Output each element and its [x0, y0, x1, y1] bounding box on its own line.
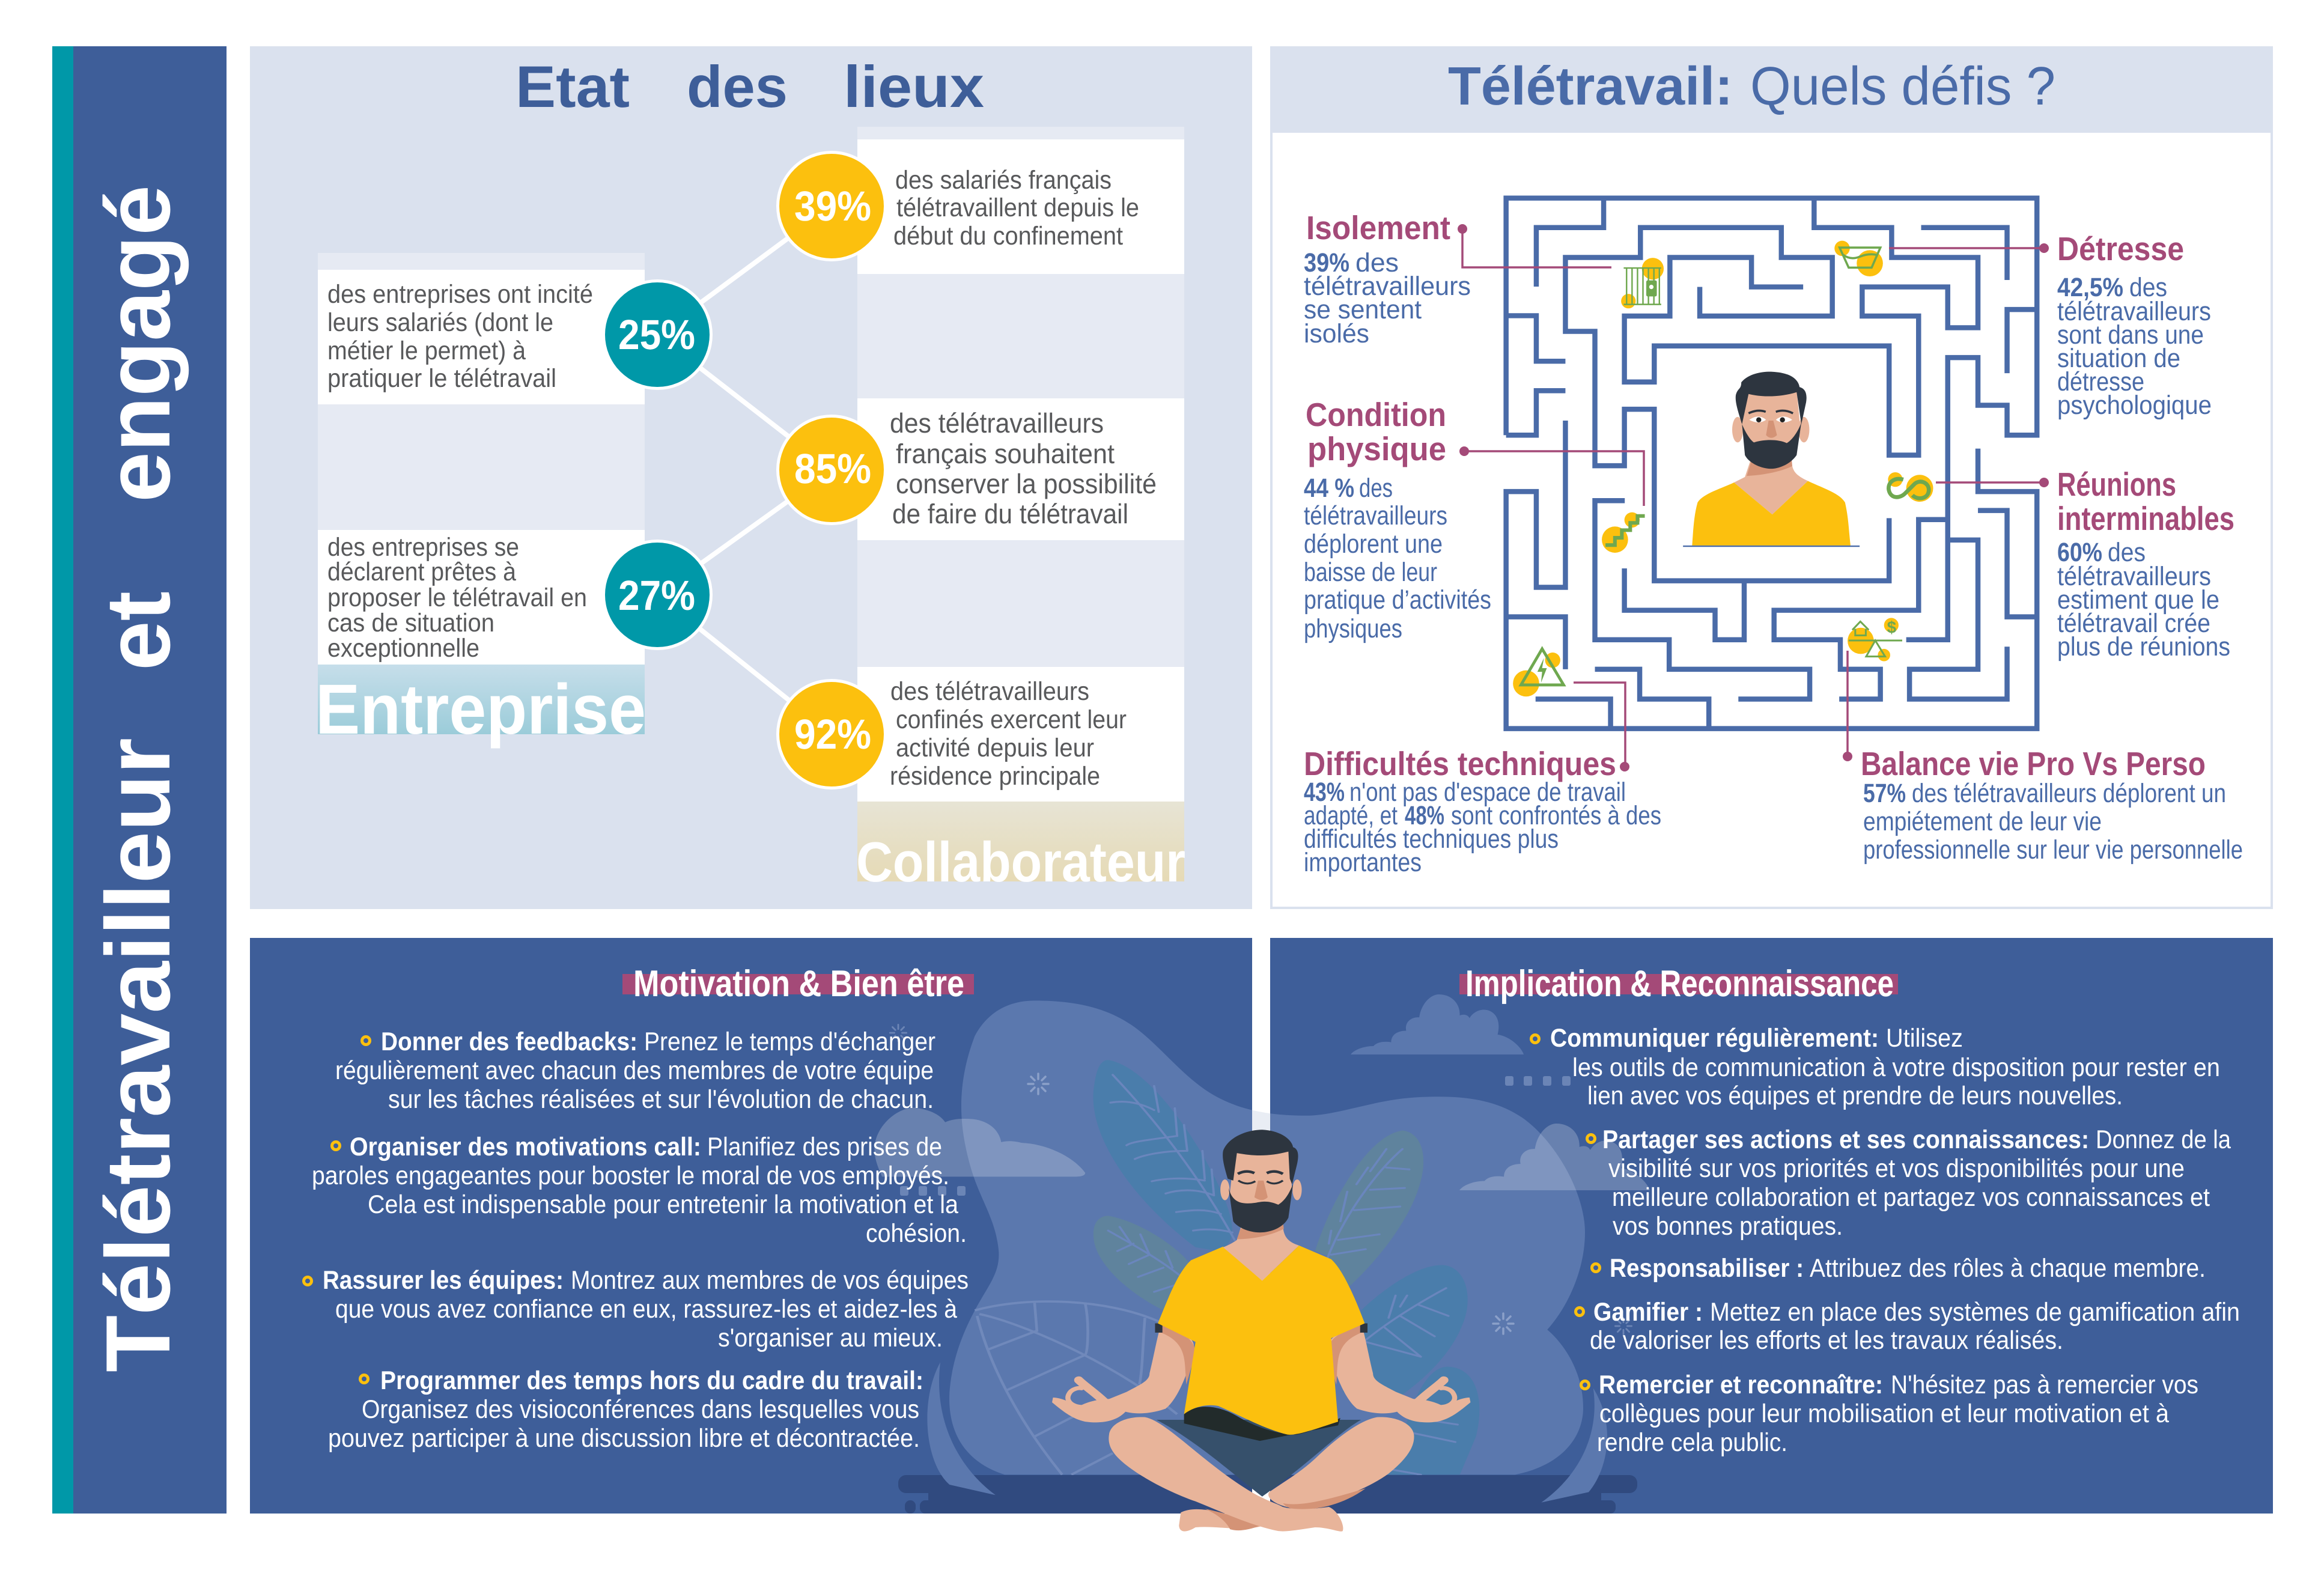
- item: communiquer: lien avec vos équipes et prendre de leurs nouvelles.: [1587, 1082, 2123, 1110]
- leaf: blue upper left: [1093, 1060, 1235, 1251]
- callout: Détresse: télétravailleurs: [2057, 297, 2211, 326]
- waist shadow: [1184, 1407, 1340, 1441]
- item: rassurer: Montrez aux membres de vos équipes: [571, 1266, 969, 1295]
- text: 85% télétravailleurs: français souhaitent: [896, 438, 1115, 469]
- callout: Condition physique: déplorent une: [1304, 529, 1443, 559]
- callout: Réunions interminables: 60%: [2057, 538, 2102, 567]
- stat: 25%: [602, 279, 713, 390]
- sidebar title: Télétravailleur: [87, 738, 189, 1372]
- text: 39% salariés: télétravaillent depuis le: [896, 193, 1139, 222]
- callout: Difficultés techniques: sont confrontés à des: [1451, 801, 1661, 830]
- item: partager: visibilité sur vos priorités et vos disponibilités pour une: [1608, 1154, 2185, 1183]
- heading: Télétravail quels défis: [1448, 56, 2055, 117]
- text: 85% télétravailleurs: conserver la possibilité: [896, 468, 1157, 499]
- text: 25% entreprises: des entreprises ont incité: [327, 280, 593, 309]
- callout: Réunions interminables: des: [2108, 538, 2146, 567]
- leg right shadow: [1283, 1488, 1366, 1510]
- callout: Isolement: [1304, 209, 1471, 348]
- blob: [949, 1000, 1585, 1474]
- item: rassurer: s'organiser au mieux.: [718, 1324, 943, 1352]
- text: 92% télétravailleurs: résidence principale: [890, 762, 1100, 791]
- callout: Condition physique: physique: [1307, 430, 1446, 467]
- callout: Détresse: sont dans une: [2057, 320, 2204, 350]
- icon: jail: [1621, 258, 1664, 308]
- panel: implication text: [1459, 963, 2240, 1457]
- icon: wash tub: [1834, 241, 1883, 276]
- item: feedbacks: Prenez le temps d'échanger: [644, 1027, 935, 1056]
- icon: stairs: [1602, 513, 1645, 553]
- item: motivations call: Planifiez des prises de: [707, 1133, 942, 1161]
- callout: Détresse: psychologique: [2057, 391, 2212, 420]
- leaf: large outline: [975, 1301, 1177, 1474]
- item: feedbacks: régulièrement avec chacun des membres de votre équipe: [335, 1056, 934, 1085]
- callout: Balance vie Pro Vs Perso: Balance vie Pro Vs Perso: [1861, 745, 2206, 782]
- callout: Détresse: des: [2129, 273, 2167, 302]
- cloud right: [1459, 1124, 1650, 1190]
- callout: Balance vie Pro Vs Perso: empiétement de leur vie: [1863, 807, 2102, 836]
- floor band: [898, 1475, 1637, 1514]
- item: gamifier: [1575, 1298, 2240, 1355]
- icon: balance: $: [1887, 618, 1896, 636]
- item: gamifier: Gamifier :: [1593, 1298, 1703, 1327]
- callout: Difficultés techniques: 48%: [1405, 801, 1444, 830]
- connector lines: [657, 206, 832, 734]
- item: temps hors cadre: pouvez participer à une discussion libre et décontractée.: [328, 1424, 920, 1453]
- item: remercier: N'hésitez pas à remercier vos: [1891, 1371, 2198, 1399]
- heading: Etat des lieux: [516, 53, 984, 120]
- label: Entreprise: Entreprise: [315, 670, 646, 749]
- item: responsabiliser: Attribuez des rôles à chaque membre.: [1810, 1254, 2206, 1283]
- stat: 92%: 92%: [794, 711, 871, 758]
- callout: Isolement: télétravailleurs: [1304, 272, 1471, 301]
- center figure: man bust: [1683, 372, 1860, 546]
- text: 27% entreprises: déclarent prêtes à: [327, 558, 516, 586]
- leg right: [1268, 1417, 1414, 1509]
- callout: Condition physique: physiques: [1304, 614, 1402, 644]
- callout: Isolement: Isolement: [1306, 209, 1450, 246]
- text: 39% salariés: [893, 166, 1139, 251]
- text: 27% entreprises: exceptionnelle: [327, 634, 479, 663]
- item: partager: meilleure collaboration et partagez vos connaissances et: [1612, 1183, 2210, 1212]
- callout: Réunions interminables: [2057, 466, 2234, 662]
- text: 92% télétravailleurs: confinés exercent leur: [896, 705, 1127, 734]
- beard: [1229, 1184, 1293, 1232]
- stat: 27%: 27%: [618, 572, 695, 619]
- item: gamifier: Mettez en place des systèmes de gamification afin: [1710, 1298, 2240, 1327]
- item: responsabiliser: Responsabiliser :: [1610, 1254, 1804, 1283]
- callout: Difficultés techniques: n'ont pas d'espace de travail: [1349, 777, 1626, 807]
- sidebar: [52, 46, 227, 1514]
- background illustration: [874, 994, 1650, 1514]
- face: [1230, 1151, 1292, 1231]
- text: 25% entreprises: leurs salariés (dont le: [327, 308, 553, 337]
- callout: Détresse: détresse: [2057, 367, 2144, 397]
- foot left shadow: [1205, 1509, 1261, 1530]
- item: remercier: [1581, 1371, 2198, 1457]
- item: motivations call: cohésion.: [866, 1219, 967, 1248]
- item: remercier: Remercier et reconnaître:: [1599, 1371, 1883, 1399]
- text: 85% télétravailleurs: de faire du télétravail: [892, 498, 1128, 529]
- callout: Détresse: situation de: [2057, 344, 2180, 373]
- callout: Condition physique: Condition: [1306, 396, 1446, 433]
- arms and hands: [1052, 1323, 1470, 1422]
- callout: Balance vie Pro Vs Perso: professionnelle sur leur vie personnelle: [1863, 835, 2243, 865]
- stat: 39%: 39%: [794, 183, 871, 230]
- stat: 92%: [776, 679, 887, 790]
- maze: [1506, 198, 2037, 729]
- callout: Réunions interminables: estiment que le: [2057, 585, 2219, 615]
- hand left: [1052, 1380, 1127, 1422]
- sidebar title: [87, 185, 189, 1372]
- stat: 25%: 25%: [618, 311, 695, 358]
- callout: Réunions interminables: télétravail crée: [2057, 609, 2210, 638]
- icon: warning: [1513, 649, 1563, 696]
- neck shadow: [1237, 1222, 1284, 1239]
- icon: infinity: [1888, 472, 1933, 502]
- callout: Difficultés techniques: adapté, et: [1304, 801, 1398, 830]
- item: responsabiliser: [1592, 1254, 2206, 1283]
- faint blob across gap: [949, 1000, 1585, 1474]
- label: Collaborateur: Collaborateur: [856, 830, 1185, 893]
- leg left: [1109, 1417, 1343, 1532]
- shorts: [1157, 1420, 1361, 1497]
- text: 27% entreprises: proposer le télétravail en: [327, 583, 587, 612]
- item: temps hors cadre: Programmer des temps hors du cadre du travail:: [380, 1366, 923, 1395]
- callout: Difficultés techniques: 43%: [1304, 777, 1345, 807]
- item: remercier: rendre cela public.: [1597, 1428, 1787, 1457]
- callout: Détresse: Détresse: [2057, 230, 2184, 267]
- leaf: blue right: [1343, 1265, 1468, 1407]
- cloud top right: [1351, 994, 1524, 1054]
- callout: Détresse: 42,5%: [2057, 273, 2123, 302]
- text: 25% entreprises: [327, 280, 593, 393]
- sidebar title: engagé: [87, 185, 189, 502]
- dots left: [900, 1186, 966, 1196]
- callout: Difficultés techniques: importantes: [1304, 848, 1422, 877]
- heading: Motivation et bien être: Motivation & Bien être: [633, 963, 964, 1005]
- hair: [1223, 1130, 1298, 1184]
- heading: Télétravail quels défis: Quels défis ?: [1750, 56, 2055, 117]
- nose: [1255, 1181, 1268, 1200]
- item: gamifier: de valoriser les efforts et les travaux réalisés.: [1590, 1326, 2063, 1355]
- text: 25% entreprises: pratiquer le télétravail: [327, 364, 556, 393]
- cloud left: [874, 1107, 1085, 1176]
- callout: Réunions interminables: télétravailleurs: [2057, 562, 2211, 591]
- item: temps hors cadre: [328, 1366, 923, 1453]
- callout: Difficultés techniques: Difficultés techniques: [1304, 745, 1616, 782]
- leaf: green left: [1094, 1216, 1188, 1310]
- sidebar title: et: [87, 591, 189, 671]
- item: remercier: collègues pour leur mobilisation et leur motivation et à: [1599, 1399, 2169, 1428]
- callout: Condition physique: télétravailleurs: [1304, 501, 1447, 531]
- callout: Condition physique: des: [1359, 473, 1393, 503]
- stat: 27%: [602, 540, 713, 650]
- callout: Condition physique: [1304, 396, 1491, 644]
- callout: Réunions interminables: Réunions: [2057, 466, 2176, 503]
- heading: Etat des lieux: Etat: [516, 53, 630, 120]
- callout: Condition physique: pratique d’activités: [1304, 585, 1491, 615]
- callout: Difficultés techniques: [1304, 745, 1661, 877]
- callout: Réunions interminables: interminables: [2057, 500, 2234, 537]
- item: temps hors cadre: Organisez des visioconférences dans lesquelles vous: [362, 1395, 919, 1424]
- item: rassurer: [304, 1266, 969, 1352]
- leaf: green right: [1315, 1130, 1423, 1286]
- crescents: [927, 1362, 1607, 1503]
- panel: motivation background: [250, 938, 1252, 1514]
- callout: Isolement: isolés: [1304, 319, 1369, 348]
- callout: Difficultés techniques: difficultés techniques plus: [1304, 824, 1559, 854]
- item: motivations call: [312, 1133, 967, 1248]
- text: 85% télétravailleurs: des télétravailleurs: [890, 407, 1104, 439]
- dots right: [1505, 1076, 1571, 1086]
- neck: [1223, 1223, 1299, 1280]
- text: 27% entreprises: des entreprises se: [327, 533, 519, 562]
- callout: Isolement: des: [1355, 248, 1399, 278]
- meditating man: [1052, 1130, 1470, 1532]
- stat: 85%: 85%: [794, 445, 871, 492]
- stat: 85%: [776, 415, 887, 525]
- item: rassurer: que vous avez confiance en eux, rassurez-les et aidez-les à: [335, 1295, 957, 1324]
- item: rassurer: Rassurer les équipes:: [323, 1266, 564, 1295]
- callout: Balance vie Pro Vs Perso: des télétravailleurs déplorent un: [1912, 779, 2226, 808]
- callout lines and dots: [1458, 224, 2049, 771]
- ears: [1220, 1179, 1302, 1200]
- panel: motivation text: [304, 963, 974, 1453]
- callout: Isolement: se sentent: [1304, 295, 1422, 324]
- icon: balance: [1848, 618, 1902, 662]
- text: 39% salariés: début du confinement: [893, 222, 1123, 251]
- column: collaborateur: [856, 127, 1185, 893]
- item: communiquer: Utilisez: [1886, 1024, 1963, 1053]
- heading: Etat des lieux: des: [687, 53, 788, 120]
- text: 25% entreprises: métier le permet) à: [327, 336, 526, 365]
- item: motivations call: Organiser des motivations call:: [350, 1133, 701, 1161]
- text: 92% télétravailleurs: des télétravailleurs: [890, 677, 1089, 706]
- item: partager: [1587, 1125, 2231, 1241]
- panel: télétravail quels défis: [1270, 46, 2273, 908]
- callout: Condition physique: baisse de leur: [1304, 558, 1437, 587]
- text: 92% télétravailleurs: activité depuis leur: [896, 734, 1094, 762]
- item: partager: Partager ses actions et ses connaissances:: [1602, 1125, 2089, 1154]
- item: motivations call: paroles engageantes pour booster le moral de vos employés.: [312, 1161, 949, 1190]
- item: partager: vos bonnes pratiques.: [1613, 1212, 1843, 1241]
- closed eyes and brows: [1238, 1172, 1283, 1184]
- item: communiquer: les outils de communication à votre disposition pour rester en: [1572, 1053, 2220, 1082]
- text: 27% entreprises: [327, 533, 587, 663]
- hand right: [1396, 1380, 1470, 1422]
- text: 39% salariés: des salariés français: [895, 166, 1112, 195]
- item: feedbacks: [335, 1027, 935, 1114]
- callout: Isolement: 39%: [1304, 248, 1349, 278]
- callout: Balance vie Pro Vs Perso: 57%: [1863, 779, 1906, 808]
- sparkles: [890, 1024, 1632, 1334]
- item: motivations call: Cela est indispensable pour entretenir la motivation et la: [368, 1190, 958, 1219]
- item: feedbacks: Donner des feedbacks:: [381, 1027, 637, 1056]
- text: 85% télétravailleurs: [890, 407, 1157, 529]
- heading: Télétravail quels défis: Télétravail:: [1448, 56, 1733, 117]
- t-shirt: [1158, 1246, 1364, 1435]
- text: 27% entreprises: cas de situation: [327, 609, 494, 637]
- heading: Etat des lieux: lieux: [844, 53, 984, 120]
- item: communiquer: Communiquer régulièrement:: [1550, 1024, 1879, 1053]
- leaf: blue lower right: [1384, 1367, 1479, 1474]
- foot left: [1179, 1509, 1265, 1532]
- panel: implication background: [1270, 938, 2273, 1514]
- item: feedbacks: sur les tâches réalisées et sur l'évolution de chacun.: [388, 1085, 934, 1114]
- callout: Condition physique: 44 %: [1304, 473, 1354, 503]
- item: partager: Donnez de la: [2096, 1125, 2231, 1154]
- text: 92% télétravailleurs: [890, 677, 1127, 791]
- callout: Balance vie Pro Vs Perso: [1861, 745, 2243, 865]
- column: entreprise: [315, 253, 646, 749]
- stat: 39%: [776, 151, 887, 261]
- panel: état des lieux: [250, 46, 1252, 909]
- heading: Implication et reconnaissance: Implication & Reconnaissance: [1465, 963, 1894, 1005]
- callout: Réunions interminables: plus de réunions: [2057, 632, 2230, 662]
- callout: Détresse: [2057, 230, 2212, 420]
- item: communiquer: [1531, 1024, 2220, 1110]
